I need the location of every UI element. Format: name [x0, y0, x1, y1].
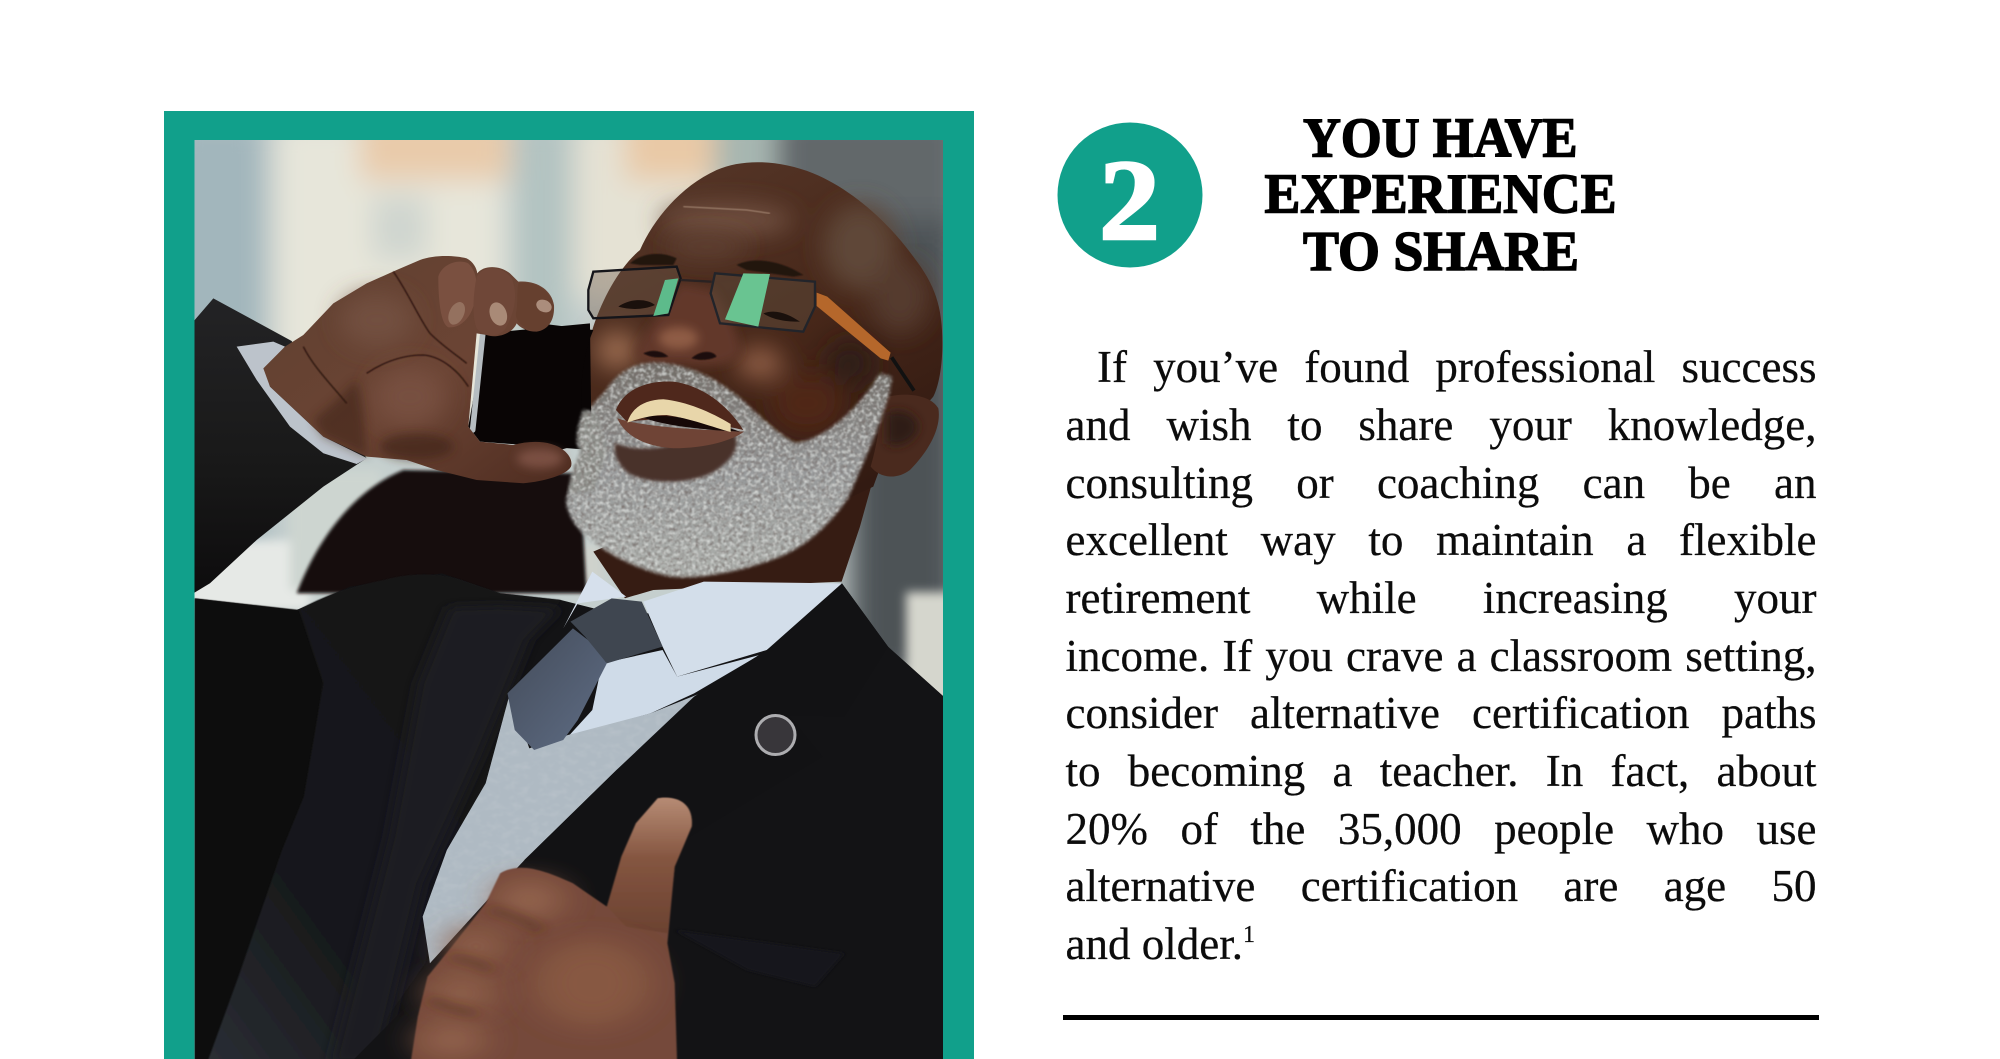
fingertips [438, 262, 477, 327]
open mouth [640, 416, 740, 432]
lower lip [617, 418, 744, 448]
body paragraph: consulting or coaching can be an [1066, 458, 1816, 508]
hand [263, 256, 571, 483]
heading [1264, 108, 1616, 283]
heading: TO SHARE [1303, 221, 1579, 283]
left lapel band [368, 607, 554, 1044]
blurred window background [170, 110, 965, 1059]
knuckle highlights [495, 880, 563, 920]
body paragraph: alternative certification are age 50 [1066, 861, 1816, 911]
shadowed upper arm [195, 598, 326, 1059]
body paragraph: excellent way to maintain a flexible [1066, 515, 1816, 565]
heading: EXPERIENCE [1264, 164, 1616, 226]
sweater [423, 690, 709, 963]
finger creases [430, 910, 541, 1013]
shirt, sweater and tie [423, 572, 888, 987]
body paragraph [1066, 342, 1816, 969]
wrist shade [313, 380, 368, 457]
ear [871, 395, 939, 477]
jacket base [195, 573, 944, 1059]
sleeve [193, 298, 367, 593]
body paragraph: income. If you crave a classroom setting, [1066, 631, 1816, 681]
body paragraph: 20% of the 35,000 people who use [1066, 804, 1816, 854]
dark chair back [297, 470, 587, 593]
bridge [681, 280, 712, 282]
beard [567, 363, 892, 577]
temple arm [817, 293, 891, 361]
body paragraph: retirement while increasing your [1066, 573, 1816, 623]
right lens [711, 273, 815, 332]
fingernails [445, 299, 468, 327]
lapel pin [756, 716, 795, 754]
divider rule [1063, 1015, 1819, 1020]
upper lip [616, 381, 743, 430]
thumb highlight [517, 448, 563, 468]
left arm and jacket [195, 573, 944, 1059]
shirt collar [643, 582, 842, 677]
body paragraph: and older.1 [1066, 919, 1255, 969]
beard shadow under lip [615, 423, 736, 482]
photo frame: teal border [164, 111, 974, 1059]
body paragraph: If you’ve found professional success [1097, 342, 1816, 392]
shirt front [568, 650, 760, 737]
head and face [567, 162, 942, 577]
tie blade [507, 628, 607, 750]
nose [635, 283, 740, 366]
phone [468, 323, 592, 450]
shirt left collar [563, 572, 626, 628]
forehead crease [683, 207, 770, 213]
glasses [588, 267, 914, 391]
body paragraph: to becoming a teacher. In fact, about [1066, 746, 1816, 796]
right reflection [725, 273, 770, 327]
left lens [588, 267, 681, 318]
jacket pocket [686, 934, 840, 984]
eyes [618, 300, 800, 322]
nostrils [643, 351, 717, 360]
section header: number badge and heading [1058, 108, 1616, 283]
face colouring [595, 235, 873, 433]
number badge: 2 [1099, 137, 1160, 265]
heading: YOU HAVE [1303, 108, 1578, 170]
right lapel [524, 583, 888, 860]
sleeve, cuff and hand [193, 256, 571, 593]
palm light [373, 367, 447, 427]
eyebrows [630, 254, 803, 277]
number badge [1058, 122, 1202, 268]
phone edge behind cheek [546, 324, 606, 494]
beard tuft over phone hand [568, 410, 607, 493]
head shape [590, 162, 942, 488]
forehead highlights [660, 203, 930, 333]
left reflection [653, 278, 678, 316]
palm creases [303, 272, 468, 403]
tie knot [570, 598, 663, 663]
body paragraph: and wish to share your knowledge, [1066, 400, 1816, 450]
jacket right body [350, 583, 944, 1059]
photo: smiling man in suit on the phone [194, 140, 943, 1059]
teeth [627, 399, 731, 432]
shoulder and front panel [207, 574, 561, 1059]
neck [593, 488, 871, 598]
thumb-up hand [411, 798, 692, 1059]
body paragraph: consider alternative certification paths [1066, 688, 1816, 738]
cuff [237, 342, 367, 464]
